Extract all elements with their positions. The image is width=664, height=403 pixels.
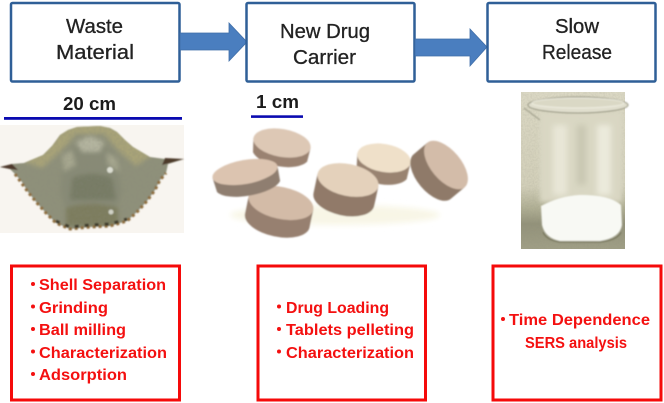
box: Waste Material: Material bbox=[56, 42, 134, 64]
tablet 1 bbox=[249, 124, 313, 171]
panel: slow release steps: SERS analysis bbox=[525, 335, 627, 352]
scale bar: 1 cm bbox=[251, 92, 303, 118]
box: Slow Release: Release bbox=[542, 42, 612, 64]
panel: drug carrier steps: Tablets pelleting bbox=[286, 322, 414, 339]
beaker glass bbox=[540, 112, 622, 202]
tablet 4 bbox=[310, 158, 382, 222]
panel: drug carrier steps: Drug Loading bbox=[286, 300, 389, 317]
panel: waste material steps: Ball milling bbox=[39, 322, 126, 339]
panel: waste material steps bbox=[12, 266, 180, 400]
arrow: waste to carrier bbox=[180, 23, 247, 61]
panel: waste material steps: Grinding bbox=[39, 300, 108, 317]
tablet shadows bbox=[230, 205, 440, 225]
box: New Drug Carrier bbox=[246, 3, 414, 82]
panel: slow release steps: Time Dependence bbox=[509, 312, 650, 329]
box: New Drug Carrier: New Drug bbox=[280, 21, 370, 43]
panel: waste material steps: Adsorption bbox=[39, 367, 127, 384]
scale bar: 20 cm: 20 cm bbox=[63, 94, 116, 114]
scale bar: 1 cm: 1 cm bbox=[256, 92, 299, 112]
box: Waste Material bbox=[11, 3, 180, 82]
white powder bbox=[541, 195, 622, 241]
box: Waste Material: Waste bbox=[66, 16, 123, 38]
tablet 6 bbox=[402, 133, 476, 208]
box: Slow Release bbox=[488, 3, 656, 82]
photo: crab shell bbox=[0, 120, 184, 233]
arrow: carrier to release bbox=[415, 29, 487, 66]
panel: slow release steps bbox=[493, 266, 661, 400]
photo: drug tablets bbox=[210, 124, 476, 243]
panel: waste material steps: Characterization bbox=[39, 345, 167, 362]
tablet 5 bbox=[353, 140, 413, 189]
photo: beaker with powder bbox=[521, 92, 628, 249]
panel: drug carrier steps bbox=[258, 266, 426, 400]
panel: drug carrier steps: Characterization bbox=[286, 345, 414, 362]
box: New Drug Carrier: Carrier bbox=[293, 47, 356, 69]
panel: waste material steps: Shell Separation bbox=[39, 277, 166, 294]
tablet 2 bbox=[210, 154, 282, 201]
tablet 3 bbox=[242, 180, 317, 243]
box: Slow Release: Slow bbox=[555, 16, 600, 38]
